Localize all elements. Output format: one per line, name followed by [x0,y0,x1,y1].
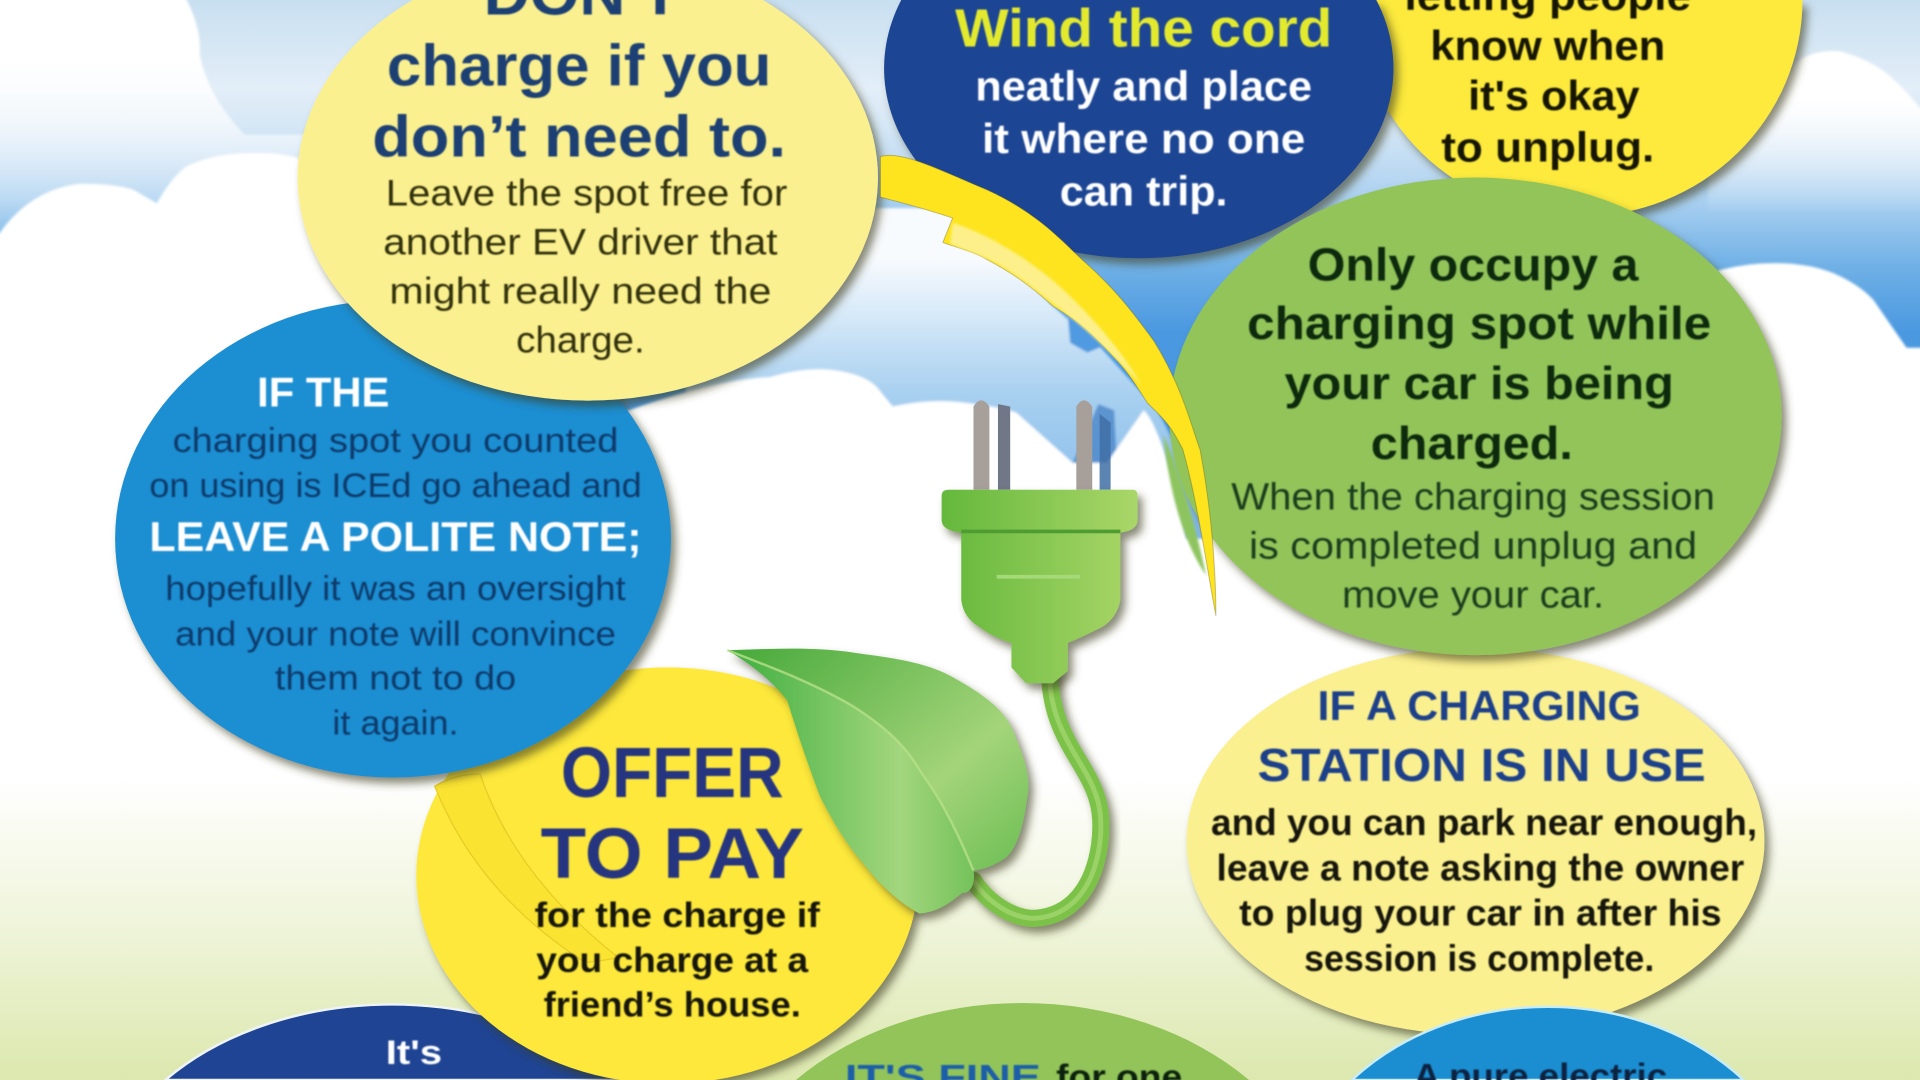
text: offer to pay [534,734,820,1024]
text: station in use [1211,682,1757,979]
text: don't charge: charge if you [387,34,771,99]
text: only occupy: charged. [1371,417,1573,469]
text: polite note [149,369,642,743]
icon: green plug with cord and leaf [727,400,1138,918]
cord [973,667,1101,918]
text: offer to pay: OFFER [561,734,784,813]
text: don't charge [372,0,787,361]
text: polite note: and your note will convince [175,615,616,653]
text: polite note: charging spot you counted [173,422,618,460]
panel: offer to pay [416,667,918,1080]
decorative swoosh inside offer bubble [435,774,618,962]
text: okay to unplug [1404,0,1691,171]
text: only occupy: move your car. [1342,574,1604,616]
text: station in use: leave a note asking the owner [1217,847,1744,888]
text: station in use: session is complete. [1304,938,1654,979]
panel: let people know when it's okay to unplug [1357,0,1802,217]
text: only occupy: your car is being [1284,357,1674,409]
text: polite note: it again. [332,705,459,743]
text: offer to pay: you charge at a [536,940,808,980]
text: only occupy: When the charging session [1231,476,1715,518]
text: okay to unplug: it's okay [1468,72,1640,119]
panel: if the spot is ICEd, leave a polite note [115,300,671,778]
yellow lightning swoosh [880,155,1216,616]
text: polite note: IF THE [257,369,389,416]
panel: wind the cord [884,0,1393,258]
panel: only occupy a charging spot [1169,178,1782,655]
text: polite note: hopefully it was an oversight [165,570,626,608]
text: don't charge: Leave the spot free for [386,173,787,214]
text: wind the cord: Wind the cord [955,0,1332,59]
text: don't charge: might really need the [389,271,771,312]
text: polite note: on using is ICEd go ahead and [149,467,642,505]
panel: bottom-centre green bubble [796,1003,1249,1080]
leaf [727,649,1028,913]
text: wind the cord [955,0,1332,215]
text: station in use: IF A CHARGING [1318,682,1641,729]
text: only occupy: Only occupy a [1308,238,1640,290]
text: offer to pay: TO PAY [541,815,804,894]
text: polite note: LEAVE A POLITE NOTE; [149,513,642,560]
plug body [942,490,1138,683]
text: okay to unplug: to unplug. [1441,124,1654,171]
text: polite note: them not to do [275,659,516,697]
text: don't charge: charge. [516,320,645,361]
plug prongs [973,400,1111,490]
panel: bottom-left navy bubble [165,1004,618,1080]
text: station in use: STATION IS IN USE [1258,739,1706,791]
text: only occupy: charging spot while [1247,297,1711,349]
panel: bottom-right blue bubble [1352,1007,1744,1080]
text: it's fine for one [845,1059,1182,1080]
text: wind the cord: can trip. [1060,168,1228,215]
text: only occupy: is completed unplug and [1249,525,1697,567]
text: station in use: and you can park near enough, [1211,802,1757,843]
panel: if a charging station is in use [1187,648,1764,1035]
text: wind the cord: it where no one [982,115,1305,162]
text: don't charge: don’t need to. [372,105,786,170]
text: okay to unplug: know when [1430,22,1665,69]
text: wind the cord: neatly and place [975,62,1312,109]
text: only occupy [1231,238,1715,616]
text: don't charge: another EV driver that [383,222,778,263]
text: it's: It's [386,1034,442,1072]
panel: don't charge if you don't need to [298,0,878,401]
text: station in use: to plug your car in after his [1239,893,1722,934]
text: offer to pay: friend’s house. [544,984,801,1024]
text: offer to pay: for the charge if [534,895,820,935]
